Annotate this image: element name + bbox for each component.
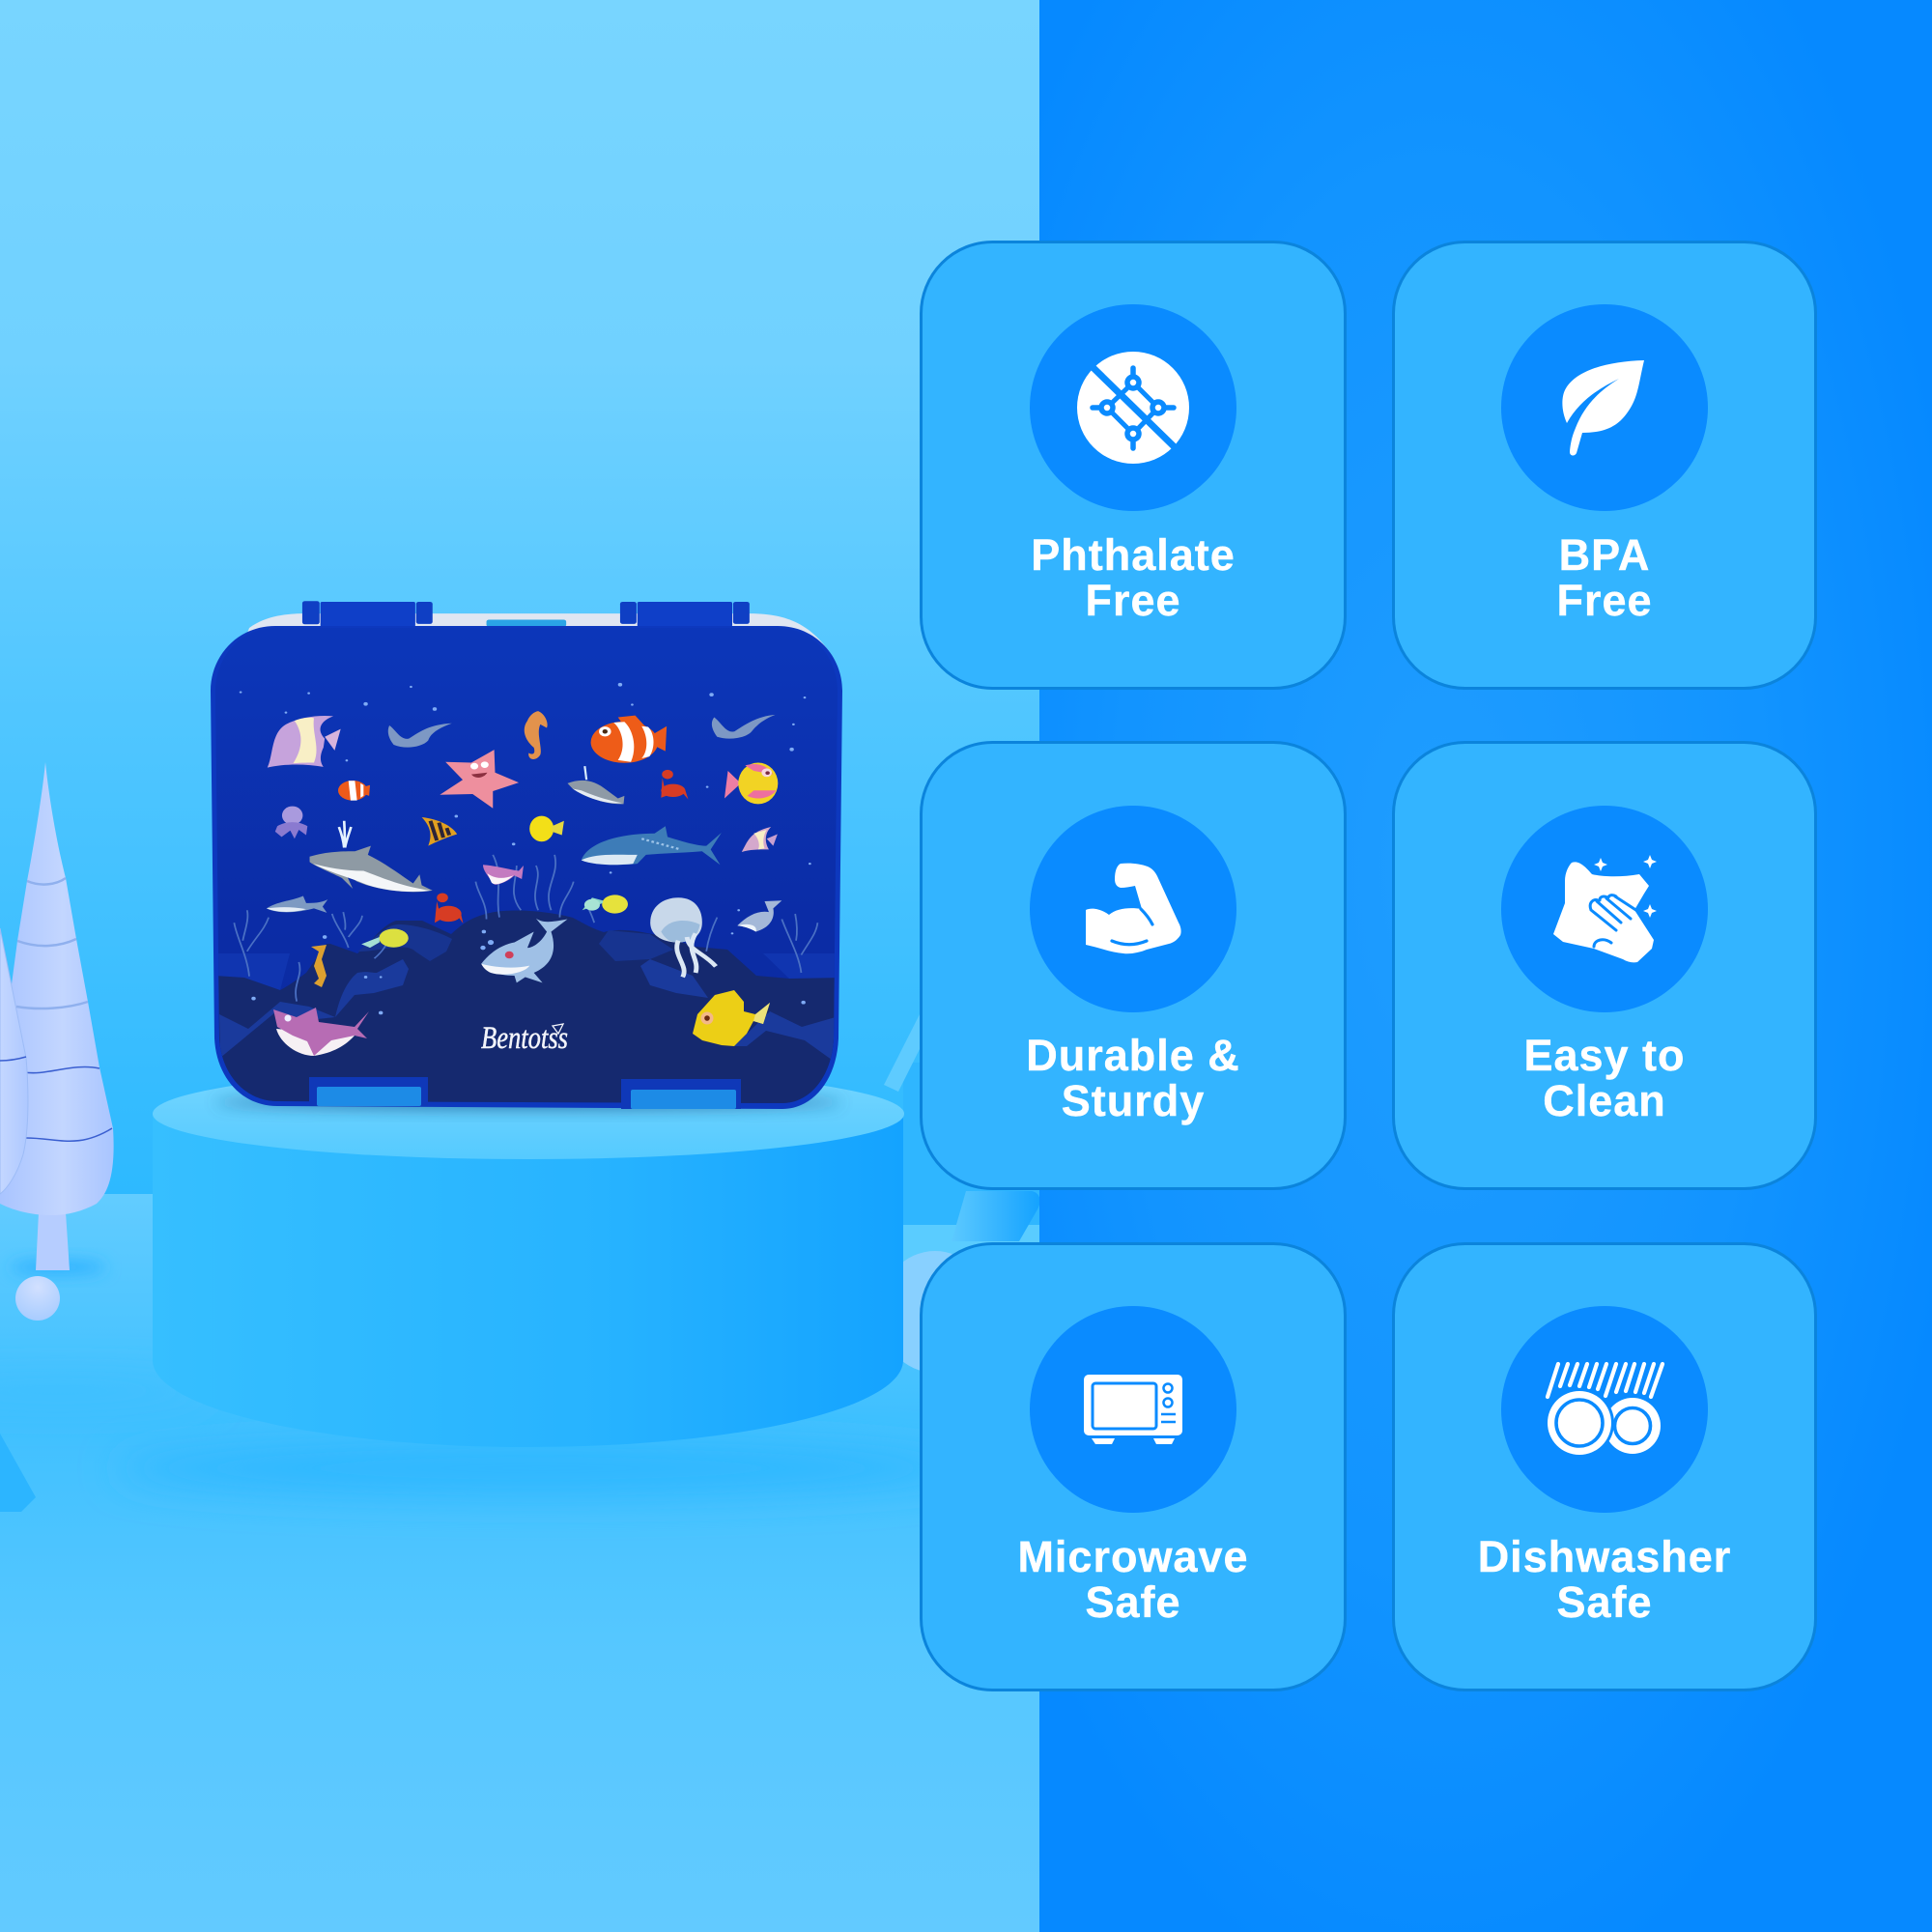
label: Dishwasher <box>1478 1532 1731 1581</box>
card: Phthalate Free <box>922 242 1345 688</box>
label: Safe <box>1556 1577 1653 1627</box>
crab lower <box>435 893 463 923</box>
whale shark <box>582 826 722 865</box>
angelfish <box>268 716 341 768</box>
spouting dolphin large <box>310 821 433 892</box>
corals and seaweed <box>234 855 817 1002</box>
small clownfish <box>338 781 370 801</box>
octopus <box>275 807 307 838</box>
decoration: small ball <box>15 1276 60 1321</box>
yellow fish big <box>693 990 770 1046</box>
icon: microwave <box>1084 1375 1182 1444</box>
starfish <box>440 750 519 809</box>
decoration: bottom-left wedge <box>0 1434 36 1512</box>
label: Durable & <box>1026 1031 1240 1080</box>
jellyfish <box>650 897 716 977</box>
label: Phthalate <box>1031 530 1236 580</box>
icon: flexed arm <box>1086 864 1181 953</box>
manta ray right <box>712 715 776 739</box>
panel: blue right background <box>1039 0 1932 1932</box>
card: Dishwasher Safe <box>1393 1244 1816 1690</box>
icon: leaf <box>1562 360 1644 456</box>
fish and coral group <box>234 683 817 1014</box>
small angelfish <box>742 827 778 852</box>
box lid body <box>211 626 842 1109</box>
mid blue hill shapes <box>219 924 836 1063</box>
label: Easy to <box>1523 1031 1686 1080</box>
bottom latch left <box>309 1077 428 1106</box>
small shark <box>267 895 327 913</box>
manta ray left <box>388 724 452 748</box>
icon: dishes under rack <box>1545 1364 1662 1458</box>
label: Clean <box>1543 1076 1666 1125</box>
blue dolphin <box>481 919 567 982</box>
seahorse top <box>525 711 548 759</box>
card: Durable & Sturdy <box>922 742 1345 1188</box>
decoration: tall tree <box>0 762 114 1270</box>
card: BPA Free <box>1393 242 1816 688</box>
pink shark large <box>273 1008 369 1056</box>
label: BPA <box>1559 530 1650 580</box>
yellow fish middle <box>529 816 564 841</box>
icon: no phthalate molecule <box>1077 352 1189 464</box>
dark sea hills <box>214 911 840 1121</box>
clownfish large <box>591 716 667 763</box>
glossy bands <box>214 953 840 990</box>
seahorse lower <box>311 945 327 987</box>
puffer fish <box>724 762 778 804</box>
box shadow <box>214 1095 842 1109</box>
label: Free <box>1556 576 1653 625</box>
icon: cloth and hand <box>1553 855 1657 962</box>
bubbles <box>240 683 811 1014</box>
label: Safe <box>1085 1577 1181 1627</box>
decoration: background rods <box>884 1014 1039 1241</box>
yellow-green fish <box>361 928 409 948</box>
small pink shark <box>483 865 524 885</box>
product: lunch box <box>208 601 845 1121</box>
sea background <box>215 679 838 990</box>
spouting dolphin small <box>567 766 624 804</box>
bottom latch right <box>621 1079 741 1109</box>
panel: light blue scene background <box>0 0 1039 1932</box>
label: Free <box>1085 576 1181 625</box>
label: Sturdy <box>1062 1076 1205 1125</box>
small dolphin right <box>737 900 781 931</box>
brand logo: Bentotss <box>481 1021 568 1056</box>
artwork <box>215 679 838 1103</box>
crab upper <box>661 770 688 800</box>
card: Microwave Safe <box>922 1244 1345 1690</box>
decoration: background sphere <box>879 1251 991 1373</box>
card: Easy to Clean <box>1393 742 1816 1188</box>
label: Microwave <box>1017 1532 1249 1581</box>
lid back and hinges <box>241 601 832 655</box>
yellow fish pair right <box>582 895 628 914</box>
decoration: front partial tree <box>0 928 28 1194</box>
podium <box>153 1068 904 1447</box>
striped fish <box>422 817 457 846</box>
